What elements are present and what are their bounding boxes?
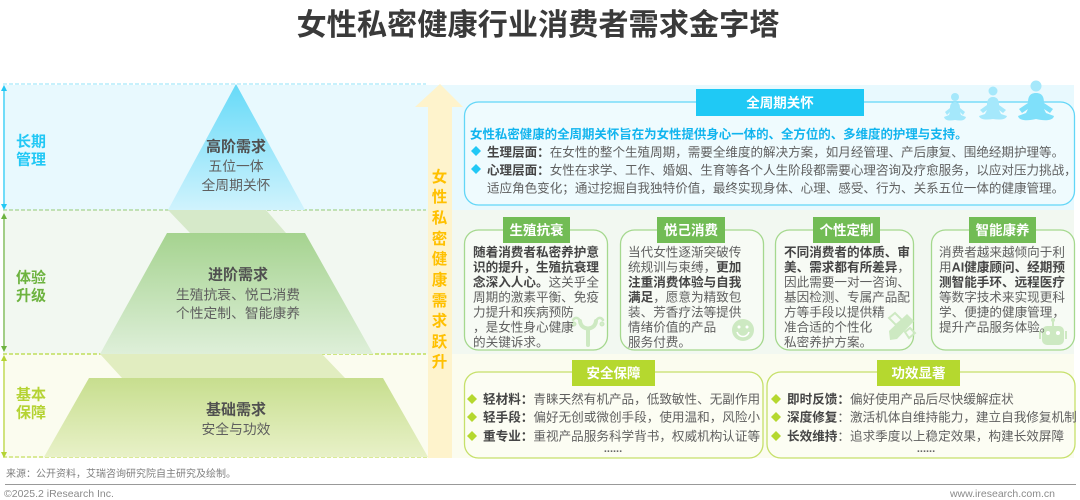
panel heading: 全周期关怀 [696,89,864,116]
panel text: 私密养护方案。 [784,335,872,350]
source note: 来源：公开资料，艾瑞咨询研究院自主研究及绘制。 [6,467,236,480]
side label: 体验升级: 体验 [16,268,46,286]
panel heading: 安全保障 [586,365,640,381]
panel heading: 全周期关怀: 全周期关怀 [746,94,814,110]
panel text: 满足，愿意为精致包 [628,290,742,305]
upward arrow: demand progression: 密 [432,229,448,248]
side label: 基本保障 [16,386,46,422]
side label: 基本保障: 保障 [16,404,46,422]
panel text: 学、便捷的健康管理， [939,305,1065,320]
panel: 个性定制 [776,217,915,350]
left arrow: experience upgrade [1,213,7,352]
pyramid [44,84,428,457]
panel text: 方等手段以提供精 [784,305,885,320]
panel text: 的关键诉求。 [473,335,549,350]
panel text [473,245,599,350]
background bands [3,84,1074,458]
upward arrow: demand progression: 求 [432,312,448,330]
panel heading: 生殖抗衰 [510,222,564,238]
panel text: 情绪价值的产品 [628,320,716,335]
panel: 功效显著 [767,360,1077,458]
icon: pencil and ruler [889,313,915,340]
ellipsis: ...... [917,443,935,455]
panel text: 随着消费者私密养护意 [473,245,599,260]
list item: 轻材料: 轻材料：青睐天然有机产品，低致敏性、无副作用 [483,392,760,406]
icon: uterus [572,318,604,345]
side label: 长期管理: 管理 [16,150,46,168]
upward arrow: demand progression: 性 [432,187,447,206]
panel text: 等数字技术来实现更科 [939,290,1065,305]
pyramid tier: basic needs: 安全与功效 [202,421,271,437]
panel text [784,245,910,350]
panel: 安全保障 [464,360,763,458]
pyramid tier: high-level needs: 五位一体 [208,159,264,174]
bullet: physiological level: 生理层面：在女性的整个生殖周期，需要全维度的解决方案，如月经管理、产后康复、围绝经期护理等。 [487,144,1064,160]
panel intro text: 女性私密健康的全周期关怀旨在为女性提供身心一体的、全方位的、多维度的护理与支持。 [470,126,968,142]
panel text: 统规训与束缚，更加 [628,260,741,275]
upward arrow: demand progression [415,84,463,458]
panel text [628,245,742,350]
left arrow: basic assurance [1,355,7,458]
pyramid tier: basic needs [44,378,428,457]
list item: 重专业: 重专业：重视产品服务科学背书，权威机构认证等 [483,428,760,444]
panel text: 装、芳香疗法等提供 [628,305,742,320]
pyramid tier: advanced needs: 进阶需求 [208,266,268,284]
panel heading [657,217,725,243]
bullet: psychological level [471,162,1077,196]
panel text: 基因检测、专属产品配 [784,290,910,305]
panel heading [572,360,655,386]
panel text: 不同消费者的体质、审 [784,245,910,260]
side label: 长期管理: 长期 [16,134,46,150]
panel heading: 功效显著 [892,365,946,381]
upward arrow: demand progression: 跃 [432,333,448,351]
panel heading [503,217,570,243]
panel: full-cycle care [464,80,1077,205]
website: www.iresearch.com.cn [949,488,1055,500]
panel text: 当代女性逐渐突破传 [628,245,741,260]
icon: robot [1039,318,1067,345]
panel text: 周期的激素平衡、免疫 [473,290,599,305]
bullet: psychological level: 心理层面：女性在求学、工作、婚姻、生育等各个人生阶段都需要心理咨询及疗愈服务，以应对压力挑战， [487,162,1077,178]
upward arrow: demand progression: 升 [432,353,447,371]
upward arrow: demand progression: 康 [432,270,448,289]
upward arrow: demand progression: 需 [432,292,447,310]
side label: 体验升级 [16,268,46,304]
panel text: 念深入人心。这关乎全 [473,275,599,290]
panel heading [969,217,1036,243]
list item: 即时反馈: 即时反馈：偏好使用产品后尽快缓解症状 [787,392,1014,406]
bullet: psychological level: 适应角色变化；通过挖掘自我独特价值，最终实现身体、心理、感受、行为、关系五位一体的健康管理。 [487,180,1064,196]
panel heading [877,360,960,386]
panel text: 识的提升，生殖抗衰理 [473,260,599,275]
panel: 悦己消费 [620,217,764,350]
pyramid tier: advanced needs: 个性定制、智能康养 [176,305,300,321]
copyright: ©2025.2 iResearch Inc. [4,488,114,500]
left arrow: long-term management [1,85,7,210]
upward arrow: demand progression: 健 [432,249,448,268]
icon: meditating figures [944,80,1054,121]
side label: 基本保障: 基本 [16,386,46,404]
footer rule [5,484,1076,485]
title: 女性私密健康行业消费者需求金字塔 [296,8,780,42]
panel text: 消费者越来越倾向于利 [939,245,1065,260]
pyramid tier: advanced needs: 生殖抗衰、悦己消费 [176,286,300,302]
panel text: 准合适的个性化 [784,320,873,335]
panel text: 用AI健康顾问、经期预 [939,260,1065,275]
upward arrow: demand progression: 私 [432,209,448,227]
panel text: ，是女性身心健康 [473,320,574,335]
panel text: 因此需要一对一咨询、 [784,276,910,290]
pyramid tier: advanced needs [100,233,373,354]
panel text: 提升产品服务体验。 [939,320,1052,335]
panel text: 美、需求都有所差异， [784,260,910,275]
side label: 体验升级: 升级 [16,286,46,304]
panel heading: 个性定制 [820,222,874,238]
panel text [939,245,1065,335]
side label: 长期管理 [16,134,46,168]
panel: 生殖抗衰 [464,217,608,350]
list item: 轻手段: 轻手段：偏好无创或微创手段，使用温和，风险小 [483,410,760,424]
pyramid tier: high-level needs: 全周期关怀 [202,177,271,193]
panel text: 服务付费。 [628,335,691,350]
panel: 智能康养 [932,217,1074,350]
pyramid tier: basic needs: 基础需求 [206,400,266,418]
list item: 深度修复: 深度修复：激活机体自维持能力，建立自我修复机制 [787,410,1077,424]
panel text: 力提升和疾病预防 [473,305,574,320]
pyramid tier: high-level needs: 高阶需求 [206,138,266,156]
pyramid tier: high-level needs [168,84,305,210]
panel text: 注重消费体验与自我 [628,275,742,290]
upward arrow: demand progression: 女 [432,167,447,186]
panel heading: 悦己消费 [664,222,718,238]
icon: smile [732,319,754,341]
ellipsis: ...... [604,443,622,455]
panel heading: 智能康养 [976,222,1030,238]
panel text: 测智能手环、远程医疗 [939,275,1065,290]
list item: 长效维持: 长效维持：追求季度以上稳定效果，构建长效屏障 [787,428,1064,444]
